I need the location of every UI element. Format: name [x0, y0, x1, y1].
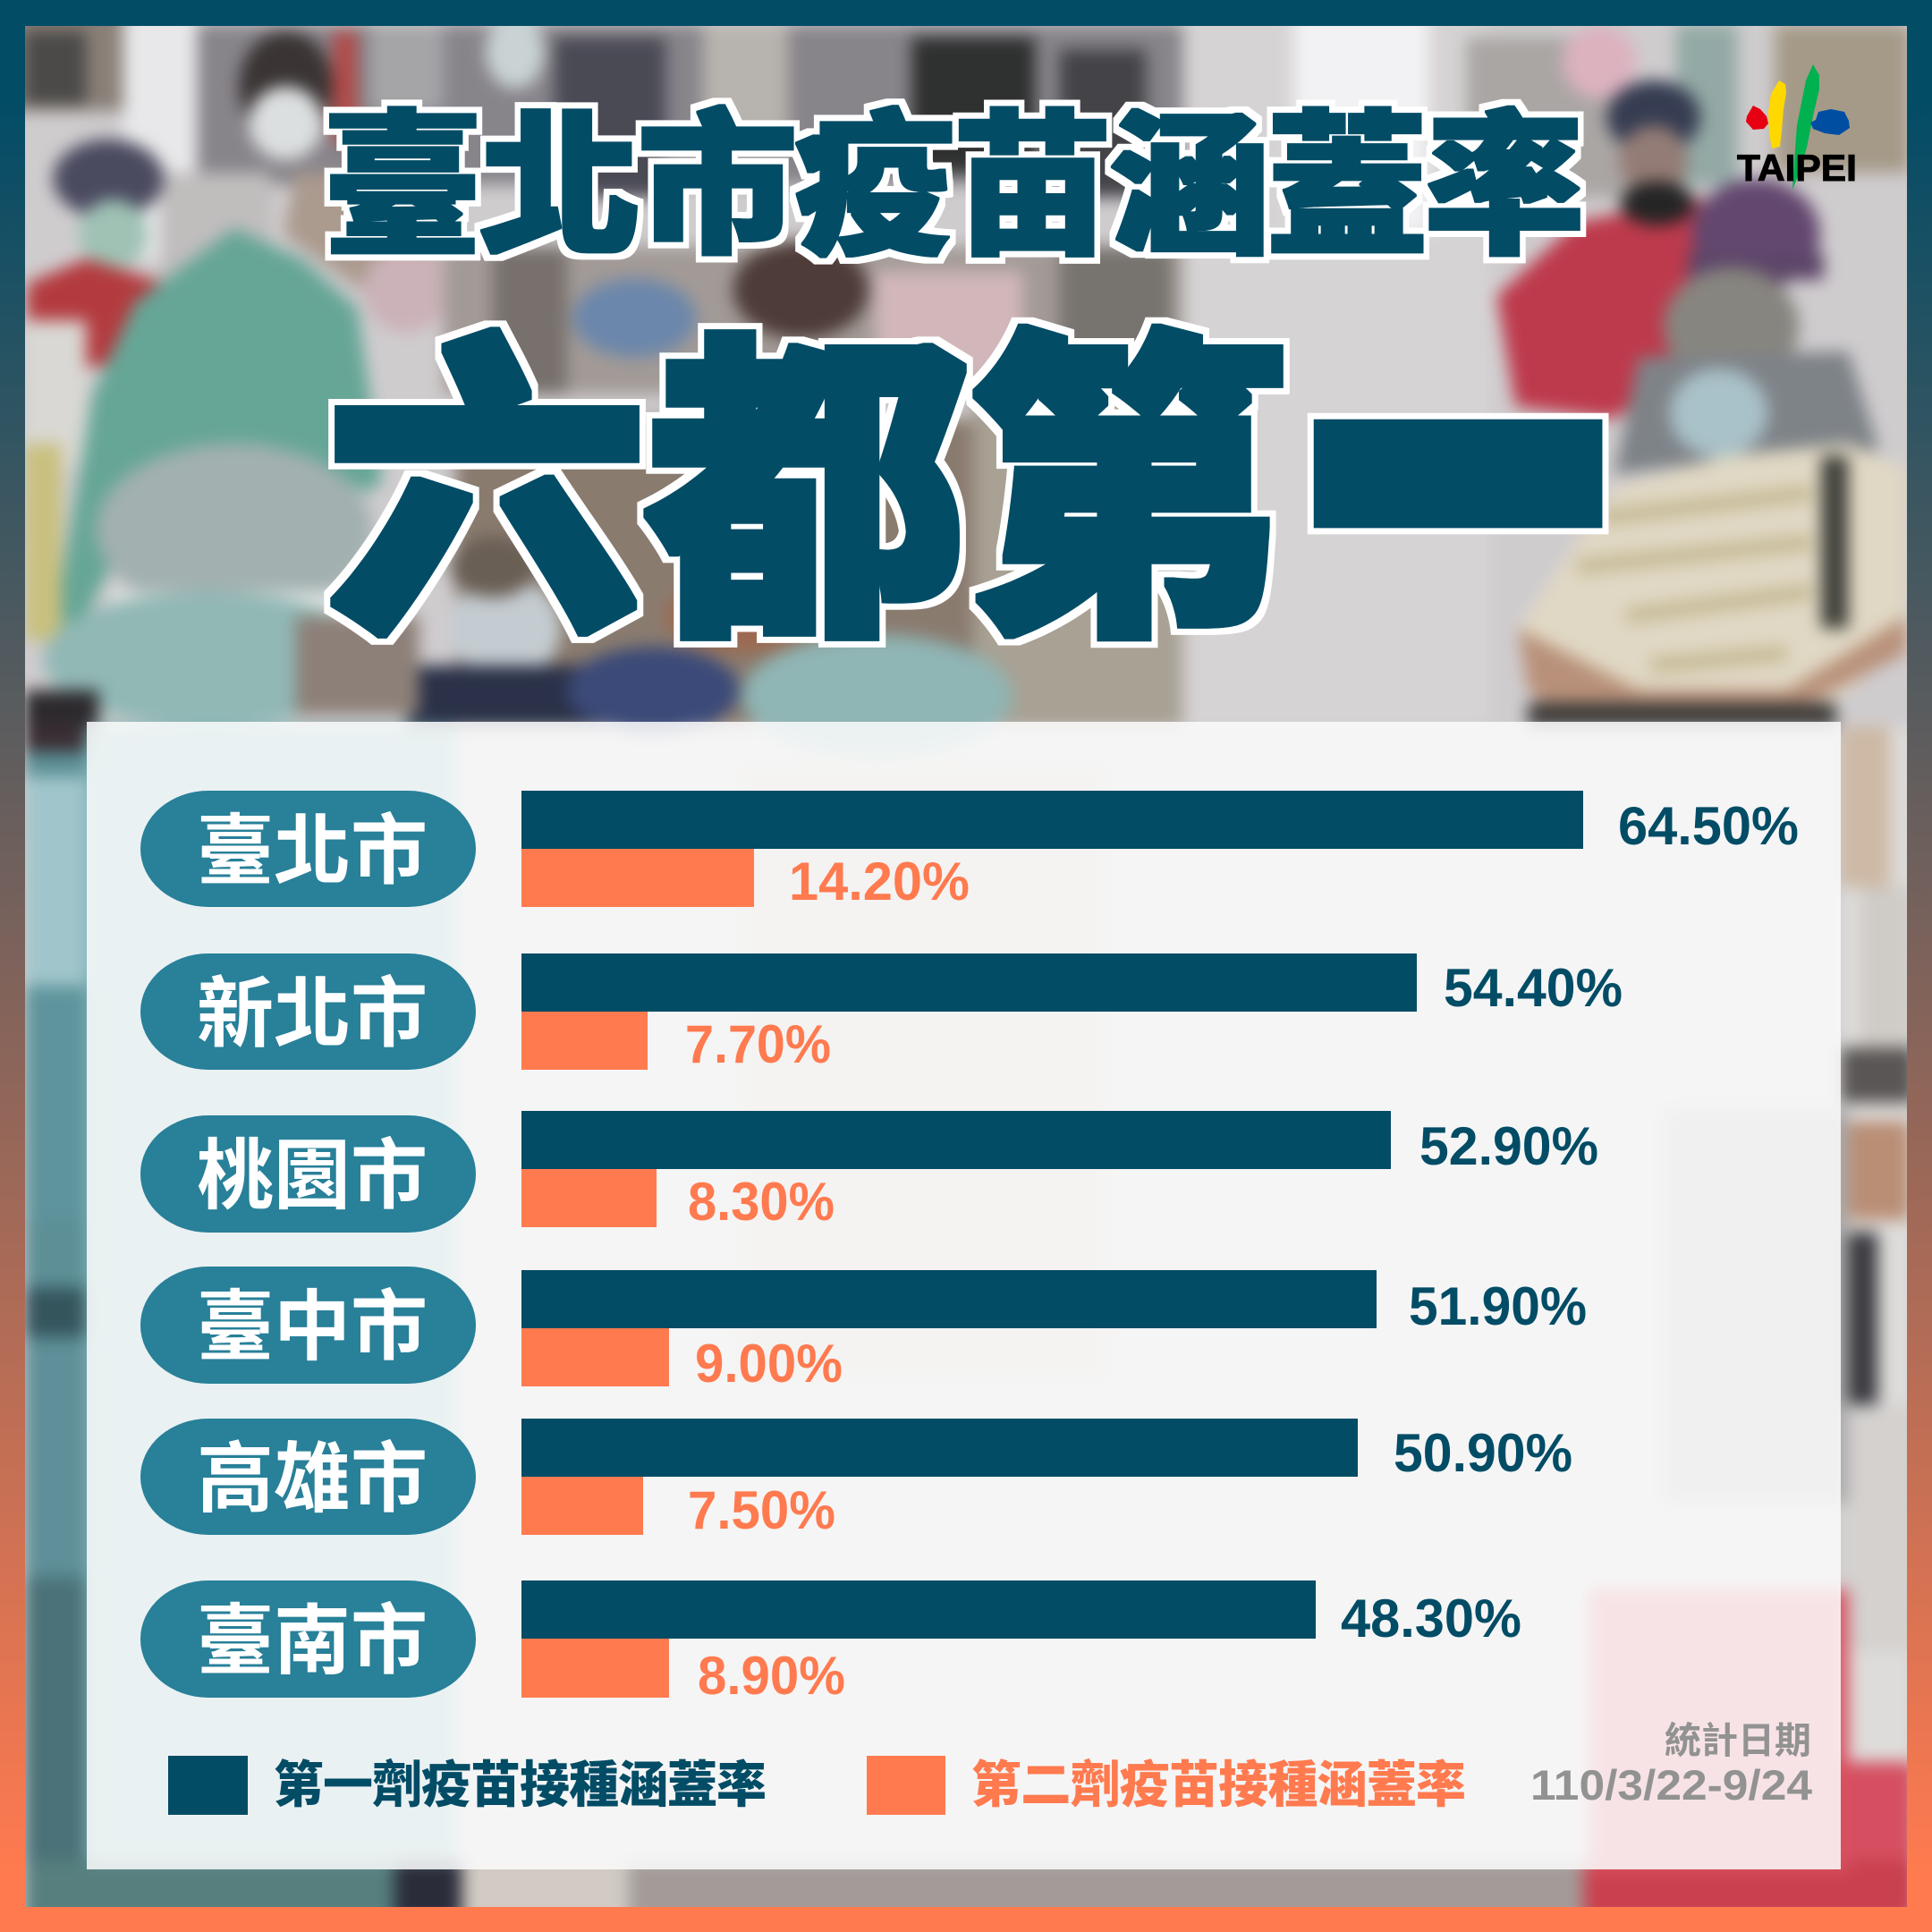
- right column beside panel: [1841, 727, 1915, 1910]
- left hat person: [53, 140, 164, 218]
- row: 新北市: 新北市: [197, 971, 428, 1057]
- legend: second dose: 第二劑疫苗接種涵蓋率: [971, 1757, 1466, 1813]
- row: 臺南市: 48.30%: [1341, 1589, 1521, 1648]
- statistics date note: 110/3/22-9/24: [1530, 1761, 1812, 1809]
- statistics date note: [1530, 1720, 1812, 1809]
- logo green stroke: [1792, 64, 1819, 190]
- title line 2: 第: [968, 316, 1290, 675]
- surgical caps: [96, 444, 372, 616]
- lower strip and panel underlay: [25, 1860, 394, 1922]
- row: 高雄市: 50.90%: [1394, 1423, 1572, 1483]
- row: 臺北市: 14.20%: [789, 852, 970, 911]
- row: 臺中市: 9.00%: [695, 1334, 843, 1394]
- row: 高雄市: [140, 1419, 1572, 1540]
- row: 新北市: 7.70%: [685, 1014, 831, 1074]
- right side people: [1497, 197, 1707, 419]
- statistics date note: 統計日期: [1665, 1720, 1811, 1761]
- title line 2: 一: [1308, 150, 1608, 852]
- title line 1: 臺北市疫苗涵蓋率: [324, 100, 1583, 275]
- title line 2: [326, 150, 1608, 852]
- logo red stroke: [1746, 106, 1768, 130]
- row: 臺南市: 8.90%: [698, 1646, 845, 1706]
- row: 高雄市: 7.50%: [688, 1480, 835, 1540]
- row: 新北市: [140, 953, 1623, 1074]
- row: 桃園市: 52.90%: [1419, 1116, 1598, 1176]
- left column beside panel: [25, 727, 86, 1922]
- row: 高雄市: 高雄市: [197, 1436, 428, 1522]
- logo wordmark: TAIPEI: [1737, 147, 1857, 189]
- panel background: [87, 722, 1841, 1869]
- row: 臺北市: 64.50%: [1618, 796, 1799, 856]
- row: 臺中市: 臺中市: [197, 1284, 428, 1370]
- green scrub person: [49, 228, 382, 653]
- row: 臺南市: 臺南市: [197, 1598, 428, 1684]
- row: 桃園市: 8.30%: [688, 1172, 835, 1232]
- title line 2: 六: [326, 316, 648, 675]
- row: 桃園市: [140, 1111, 1598, 1233]
- chart panel: [87, 722, 1841, 1869]
- row: 臺南市: [140, 1580, 1521, 1706]
- legend: first dose: 第一劑疫苗接種涵蓋率: [274, 1757, 767, 1813]
- center people: [444, 247, 1182, 394]
- row: 臺北市: [140, 791, 1799, 911]
- row: 臺中市: [140, 1267, 1587, 1394]
- logo yellow stroke: [1768, 80, 1786, 148]
- row: 臺北市: 臺北市: [197, 809, 428, 894]
- title line 2: 都: [646, 316, 968, 675]
- row: 桃園市: 桃園市: [197, 1133, 428, 1219]
- row: 新北市: 54.40%: [1444, 958, 1623, 1018]
- logo blue shape: [1810, 109, 1850, 135]
- row: 臺中市: 51.90%: [1409, 1276, 1587, 1336]
- icon: Taipei city logo: [1737, 64, 1857, 190]
